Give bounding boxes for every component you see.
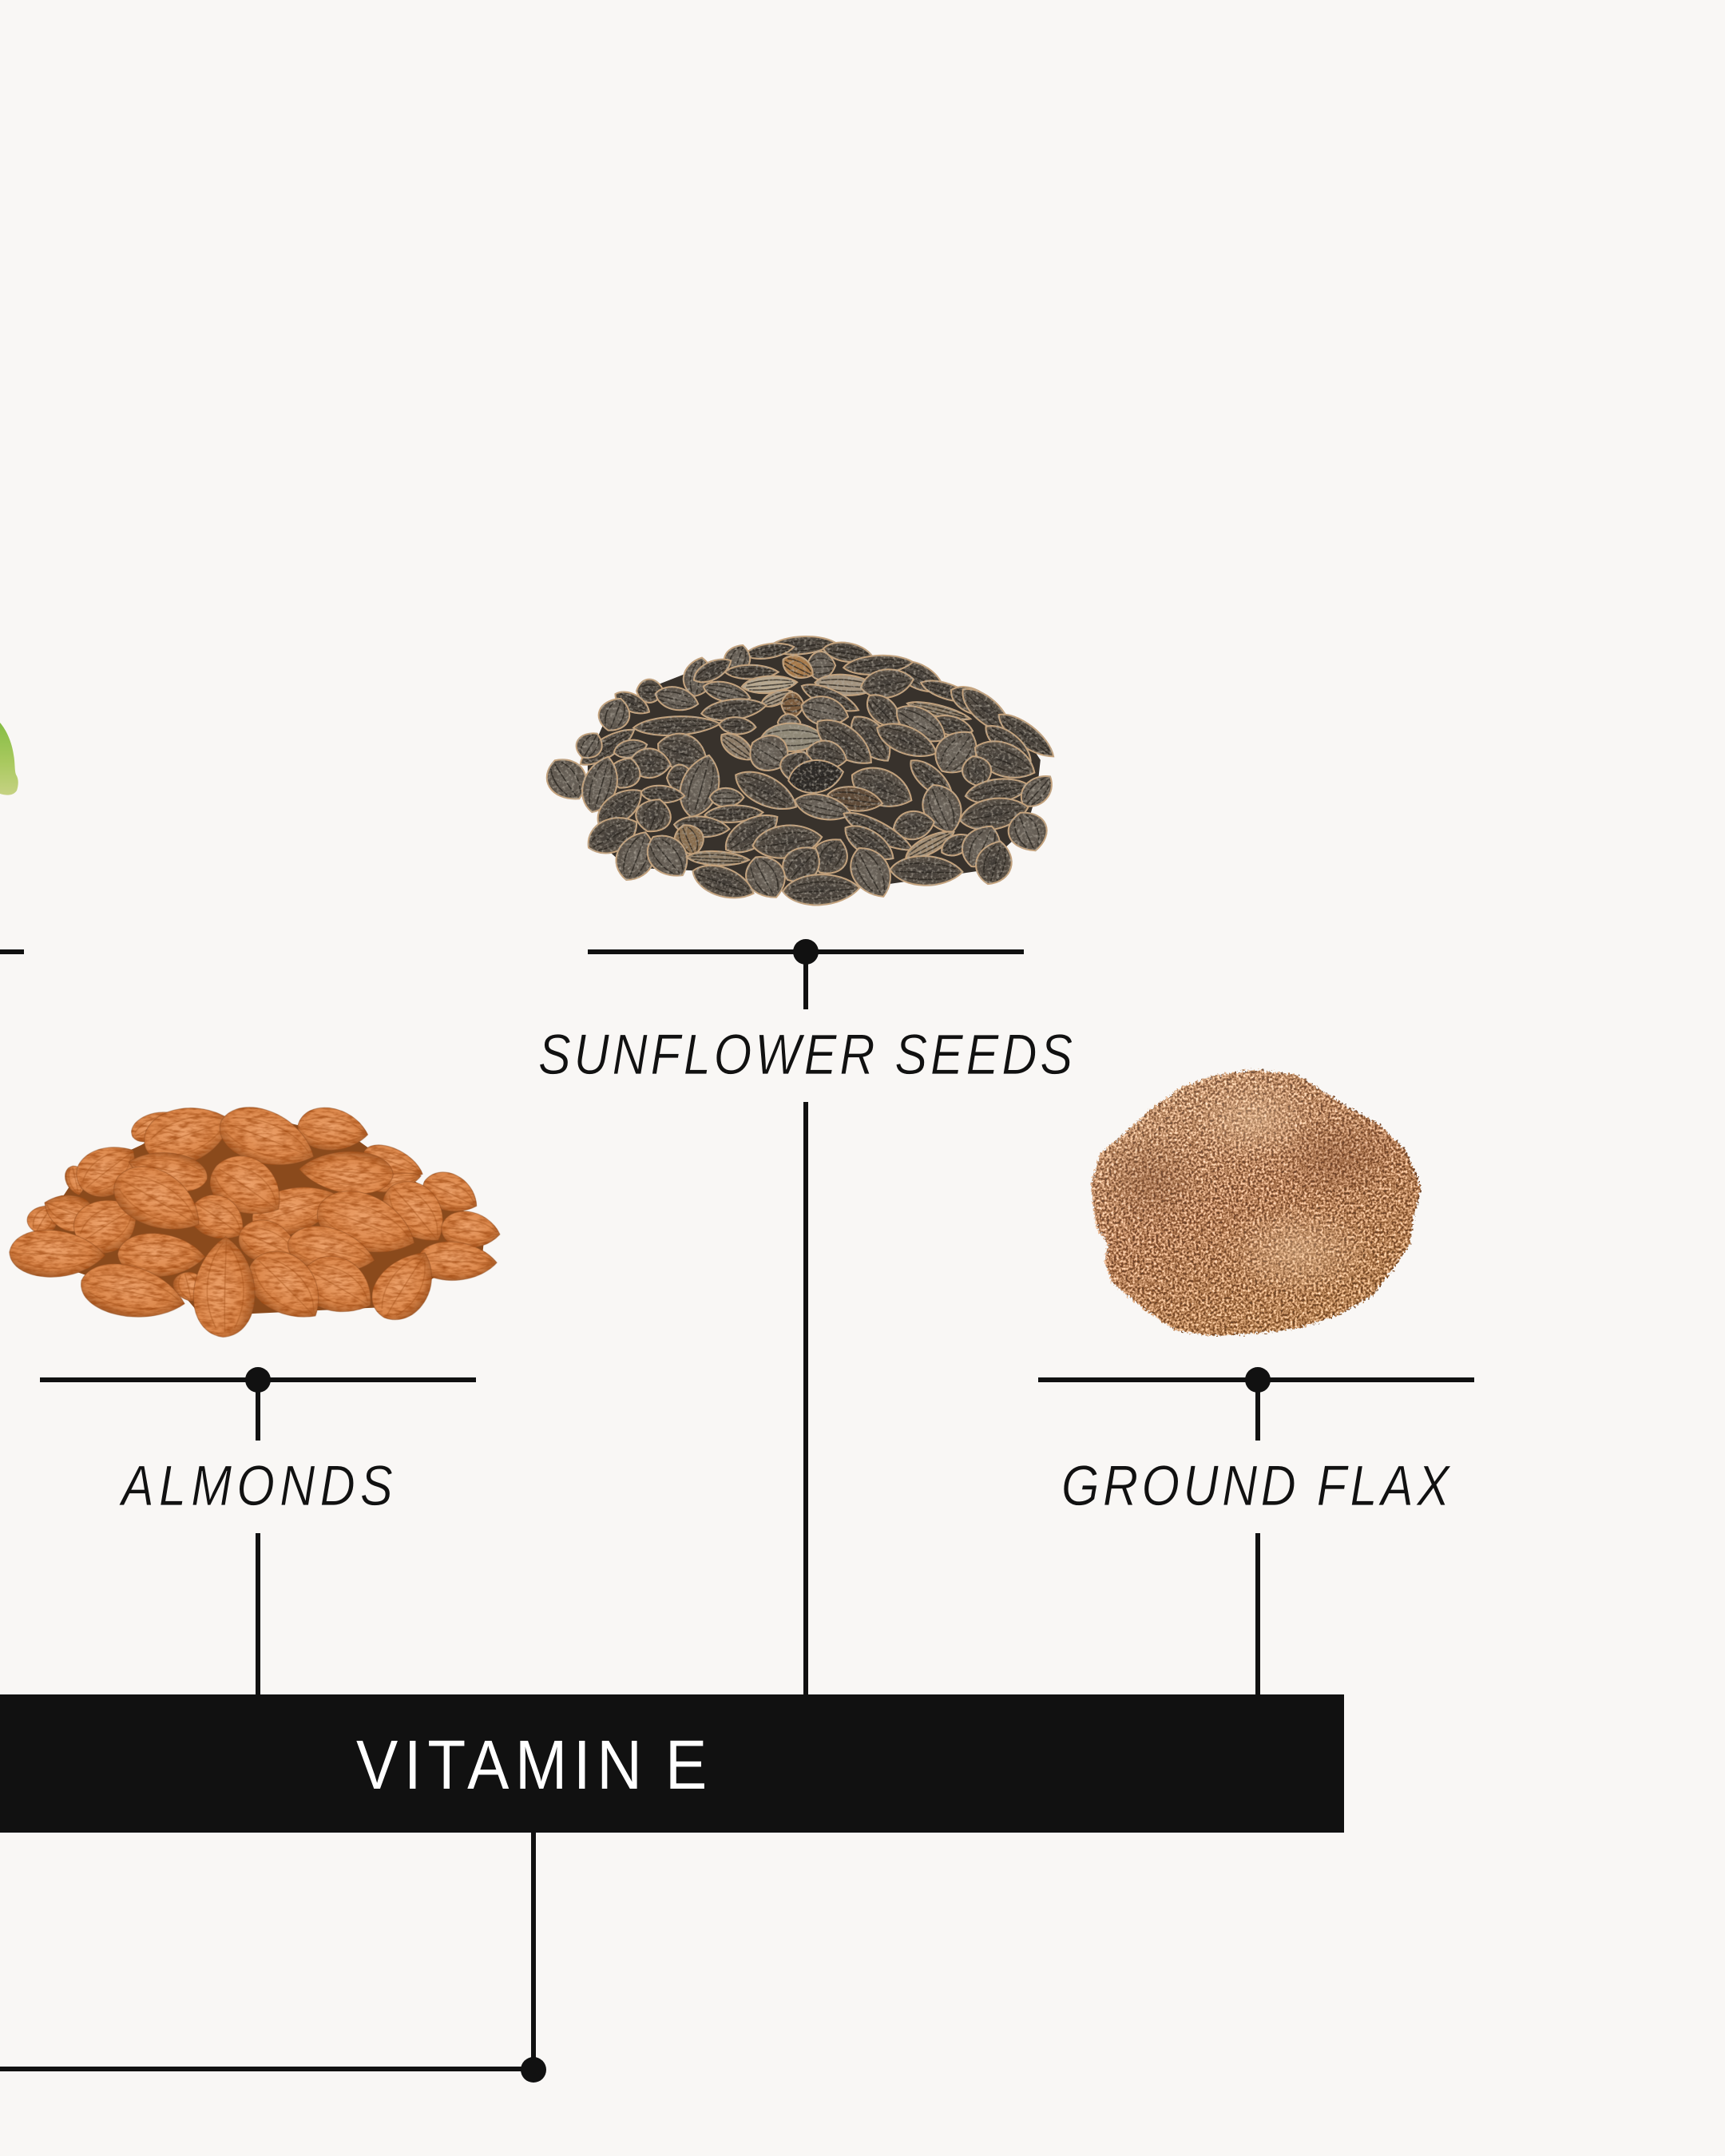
heading bar background: [0, 1694, 1344, 1833]
connector: sunflower horizontal rule with dot: [588, 939, 1024, 1009]
icon: ground flax mound: [1091, 1070, 1421, 1336]
panel: sunflower seeds: [538, 634, 1073, 1694]
connector: flax horizontal rule with dot: [1038, 1367, 1474, 1441]
connector: sunflower line to bar: [803, 1102, 808, 1694]
connector: flax line to bar: [1255, 1533, 1260, 1694]
connector: almonds horizontal rule with dot: [40, 1367, 476, 1441]
icon: green leaf fragment: [0, 723, 18, 795]
connector: almonds line to bar: [256, 1533, 260, 1694]
label: sunflower seeds: SUNFLOWER SEEDS: [538, 1024, 1073, 1087]
panel: ground flax: [1038, 1070, 1474, 1694]
label: ground flax: GROUND FLAX: [1061, 1455, 1452, 1518]
panel: vitamin E heading bar: [0, 1694, 1344, 1833]
panel: cropped leafy green item: [0, 723, 24, 954]
icon: almond pile: [8, 1096, 503, 1338]
panel: almonds: [8, 1096, 503, 1694]
heading: vitamin E: VITAMIN E: [356, 1726, 707, 1804]
icon: sunflower seed pile: [538, 634, 1061, 907]
connector: cropped horizontal rule: [0, 949, 24, 954]
connector: bar down to trunk line: [0, 1833, 546, 2083]
label: almonds: ALMONDS: [118, 1455, 393, 1518]
